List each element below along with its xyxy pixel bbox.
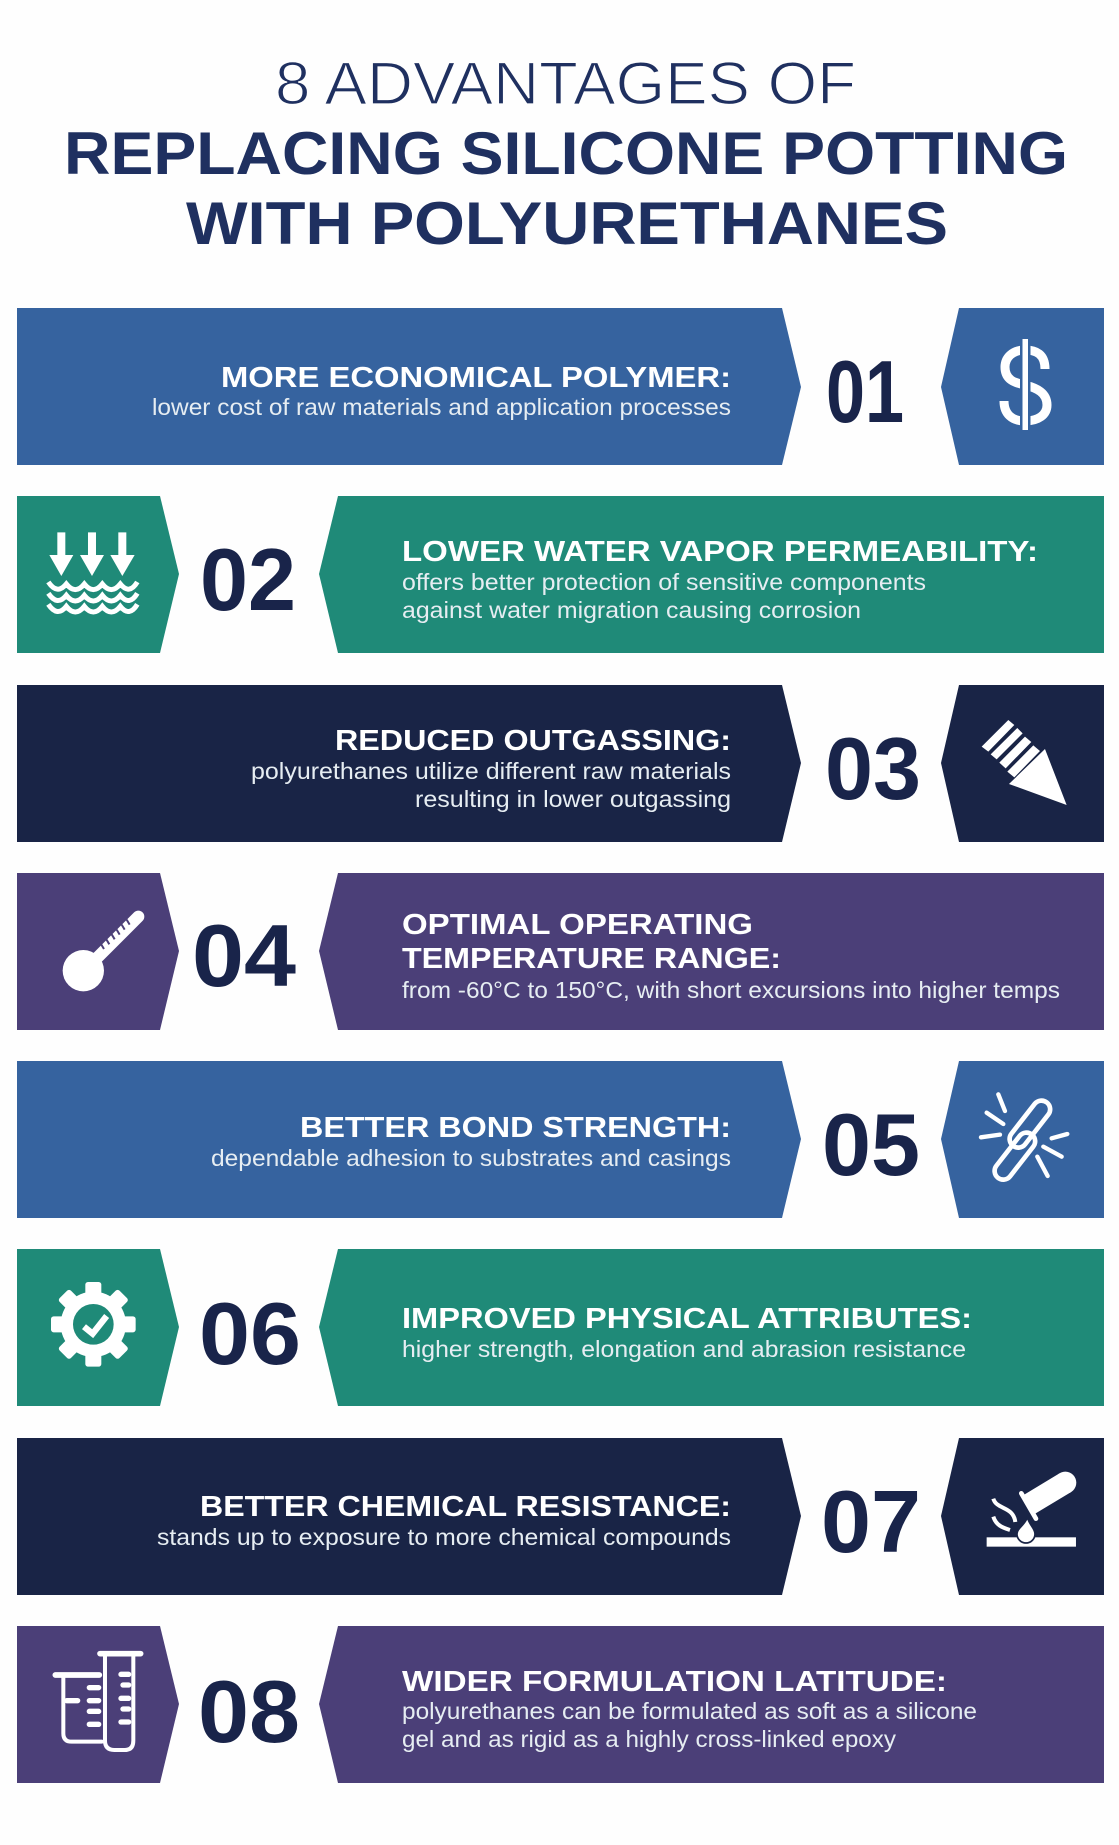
title: REPLACING SILICONE POTTING [64,120,1068,187]
panel: icon banner 01 [941,308,1104,465]
number 02: 02 [200,530,296,629]
row 03: reduced outgassing [17,685,1104,842]
number 06: 06 [199,1284,301,1383]
text block 07 [157,1491,731,1550]
text block 03: resulting in lower outgassing [415,786,731,812]
icon: pencil arrow [982,720,1067,805]
text block 01 [152,362,731,420]
text block 01: MORE ECONOMICAL POLYMER: [221,362,731,394]
panel: icon banner 08 [17,1626,179,1783]
text block 02 [402,536,1038,623]
title [64,50,1068,257]
panel: icon banner 04 [17,873,179,1030]
text block 04: from -60°C to 150°C, with short excursions into higher temps [402,977,1060,1003]
icon: chemical dropper [987,1472,1076,1547]
text block 06 [402,1303,972,1362]
icon: water with arrows [48,532,137,612]
panel: text banner 01 [17,308,801,465]
panel: icon banner 06 [17,1249,179,1406]
title: WITH POLYURETHANES [186,190,948,257]
number 07: 07 [821,1472,921,1571]
panel: icon banner 05 [941,1061,1104,1218]
text block 02: against water migration causing corrosion [402,597,861,623]
text block 03: REDUCED OUTGASSING: [335,725,731,757]
text block 06: IMPROVED PHYSICAL ATTRIBUTES: [402,1303,972,1335]
panel: text banner 07 [17,1438,801,1595]
text block 02: offers better protection of sensitive components [402,569,926,595]
icon: chain link [981,1094,1067,1183]
number 08: 08 [198,1662,300,1761]
number 03: 03 [825,719,921,818]
icon: dollar sign [1004,339,1047,430]
text block 05: dependable adhesion to substrates and casings [211,1145,731,1171]
text block 02: LOWER WATER VAPOR PERMEABILITY: [402,536,1038,568]
text block 04: TEMPERATURE RANGE: [402,943,781,975]
number 01: 01 [826,342,904,441]
icon: thermometer [63,917,138,991]
text block 04 [402,909,1060,1003]
text block 08 [402,1666,977,1752]
panel: text banner 06 [319,1249,1104,1406]
panel: text banner 08 [319,1626,1104,1783]
text block 08: gel and as rigid as a highly cross-linked epoxy [402,1726,897,1752]
icon: gear with check [51,1282,136,1367]
text block 08: polyurethanes can be formulated as soft as a silicone [402,1698,977,1724]
panel: text banner 03 [17,685,801,842]
row 07: better chemical resistance [17,1438,1104,1595]
row 02: lower water vapor permeability [17,496,1104,653]
row 06: improved physical attributes [17,1249,1104,1406]
row 04: optimal operating temperature range [17,873,1104,1030]
row 08: wider formulation latitude [17,1626,1104,1783]
text block 07: BETTER CHEMICAL RESISTANCE: [200,1491,731,1523]
text block 03: polyurethanes utilize different raw materials [251,758,731,784]
row 05: better bond strength [17,1061,1104,1218]
text block 05: BETTER BOND STRENGTH: [300,1112,731,1144]
text block 04: OPTIMAL OPERATING [402,909,753,941]
panel: text banner 02 [319,496,1104,653]
text block 08: WIDER FORMULATION LATITUDE: [402,1666,947,1698]
row 01: more economical polymer [17,308,1104,465]
icon: beaker and test tube [55,1653,141,1750]
panel: icon banner 07 [941,1438,1104,1595]
title: 8 ADVANTAGES OF [275,50,856,117]
text block 06: higher strength, elongation and abrasion resistance [402,1336,966,1362]
number 05: 05 [822,1095,920,1194]
text block 01: lower cost of raw materials and application processes [152,394,731,420]
number 04: 04 [192,906,296,1005]
text block 05 [211,1112,731,1171]
text block 03 [251,725,731,812]
text block 07: stands up to exposure to more chemical compounds [157,1524,731,1550]
panel: icon banner 02 [17,496,179,653]
panel: text banner 04 [319,873,1104,1030]
panel: text banner 05 [17,1061,801,1218]
panel: icon banner 03 [941,685,1104,842]
